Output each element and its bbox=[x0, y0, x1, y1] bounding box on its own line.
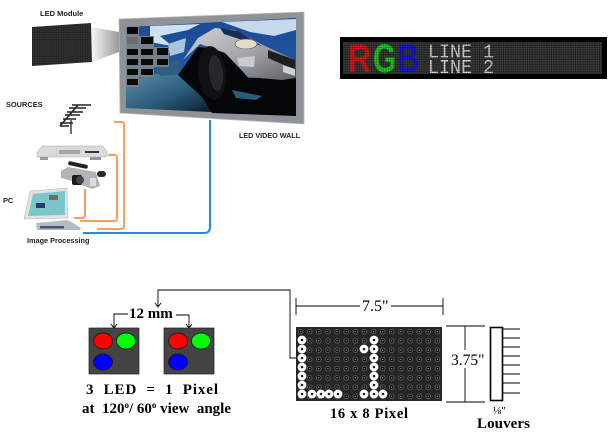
label: PC: PC bbox=[3, 196, 14, 205]
matrix background bbox=[296, 327, 442, 401]
caption: view angle: at 120 bbox=[82, 401, 124, 417]
icon: LED module panel bbox=[32, 23, 92, 66]
car plate bbox=[283, 65, 295, 76]
label: LED Module: LED Module bbox=[40, 9, 83, 18]
label: Image Processing: Image Processing bbox=[27, 236, 89, 245]
wall frame bbox=[119, 12, 304, 124]
icon: PC computer bbox=[24, 188, 81, 230]
label: 12 mm with arrows: 12 mm bbox=[129, 306, 173, 322]
caption: view angle: / 60 bbox=[128, 401, 152, 417]
clouds bbox=[150, 24, 200, 46]
caption: view angle: o bbox=[124, 400, 130, 410]
LED pixel left bbox=[89, 328, 139, 374]
caption: 1/8 inch: ⅛" bbox=[493, 405, 506, 417]
car headlight bbox=[235, 39, 257, 49]
LED matrix 16 x 8 bbox=[296, 327, 442, 401]
lit pixels bbox=[298, 336, 387, 398]
label: 12 mm with arrows bbox=[111, 306, 192, 328]
blue cable bbox=[83, 120, 210, 233]
car fog lamp bbox=[237, 56, 255, 67]
dimension: 3.75 inch height: 3.75" bbox=[451, 352, 484, 369]
sign RGB letters bbox=[348, 37, 419, 81]
sign housing bbox=[340, 37, 607, 79]
RGB LED sign bbox=[340, 37, 607, 81]
LED video wall bbox=[119, 12, 304, 124]
louver side view bbox=[490, 328, 520, 400]
label: SOURCES: SOURCES bbox=[6, 100, 43, 109]
rock under car bbox=[232, 90, 262, 100]
caption: 16 x 8 Pixel: 16 x 8 Pixel bbox=[330, 406, 408, 422]
dimension: 7.5 inch width bbox=[296, 298, 443, 315]
sign RGB letters: B bbox=[397, 37, 419, 81]
sign text lines: LINE 1 bbox=[428, 42, 494, 64]
car body bbox=[183, 28, 295, 80]
sign LED dot overlay bbox=[343, 42, 602, 74]
sign text lines bbox=[428, 42, 494, 79]
zoom cone from module to wall bbox=[92, 27, 119, 62]
car wheel bbox=[195, 45, 229, 101]
car shadow bbox=[178, 47, 296, 116]
sign RGB letters: R bbox=[348, 37, 371, 81]
orange cables bbox=[74, 122, 124, 229]
LED pixel right bbox=[164, 328, 214, 374]
missing module tiles bbox=[127, 27, 168, 85]
caption: Louvers: Louvers bbox=[477, 416, 530, 432]
sign text lines: LINE 2 bbox=[428, 57, 494, 79]
caption: view angle: view angle bbox=[156, 401, 231, 417]
car windscreen bbox=[220, 28, 262, 46]
dimension: 3.75 inch height bbox=[446, 326, 485, 402]
rocks bbox=[126, 72, 212, 112]
sign RGB letters: G bbox=[373, 37, 396, 81]
connector line from pixel to panel bbox=[155, 290, 296, 358]
car grille bbox=[268, 50, 295, 70]
sign face bbox=[343, 42, 602, 74]
lit pixel centres bbox=[301, 339, 384, 395]
caption: view angle: o bbox=[152, 400, 157, 410]
dimension: 7.5 inch width: 7.5" bbox=[362, 298, 389, 315]
label: LED VIDEO WALL: LED VIDEO WALL bbox=[239, 131, 301, 140]
icon: video camera bbox=[61, 161, 106, 189]
icon: antenna bbox=[60, 105, 91, 134]
caption: 3 LED = 1 Pixel: 3 LED = 1 Pixel bbox=[86, 382, 218, 398]
wall screen image bbox=[126, 18, 296, 116]
tile staircase backing bbox=[126, 26, 169, 87]
icon: DVD player bbox=[37, 146, 107, 160]
